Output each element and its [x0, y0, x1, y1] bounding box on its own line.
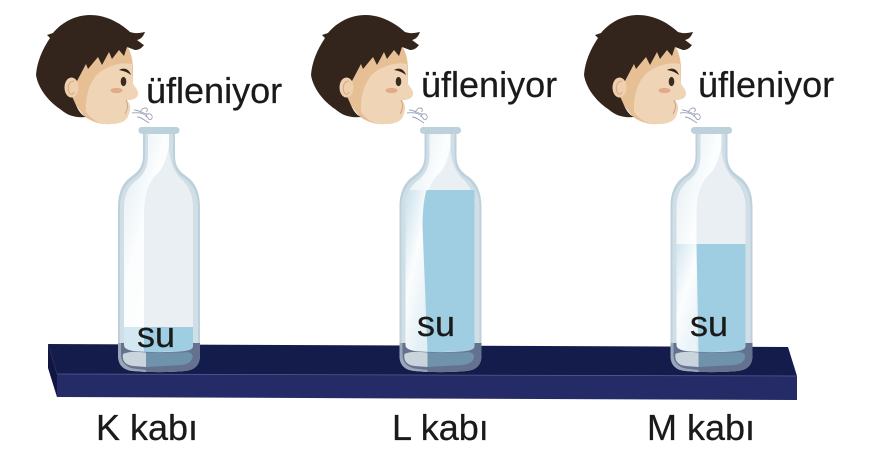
head K [36, 15, 152, 124]
water K [124, 327, 193, 352]
label M kabı: M kabı [647, 407, 755, 448]
label K kabı: K kabı [96, 407, 198, 448]
bottle M [670, 127, 752, 372]
head L [311, 15, 427, 124]
label su K: su [137, 314, 175, 355]
water M [676, 244, 746, 352]
label L kabı: L kabı [392, 407, 489, 448]
label üfleniyor M: üfleniyor [698, 64, 834, 105]
water L [406, 190, 474, 352]
label üfleniyor K: üfleniyor [146, 70, 282, 111]
head M [584, 15, 700, 124]
platform [48, 344, 797, 400]
label su L: su [417, 303, 455, 344]
bottle K [118, 127, 200, 372]
label üfleniyor L: üfleniyor [421, 64, 557, 105]
bottle L [400, 127, 482, 372]
label su M: su [690, 303, 728, 344]
